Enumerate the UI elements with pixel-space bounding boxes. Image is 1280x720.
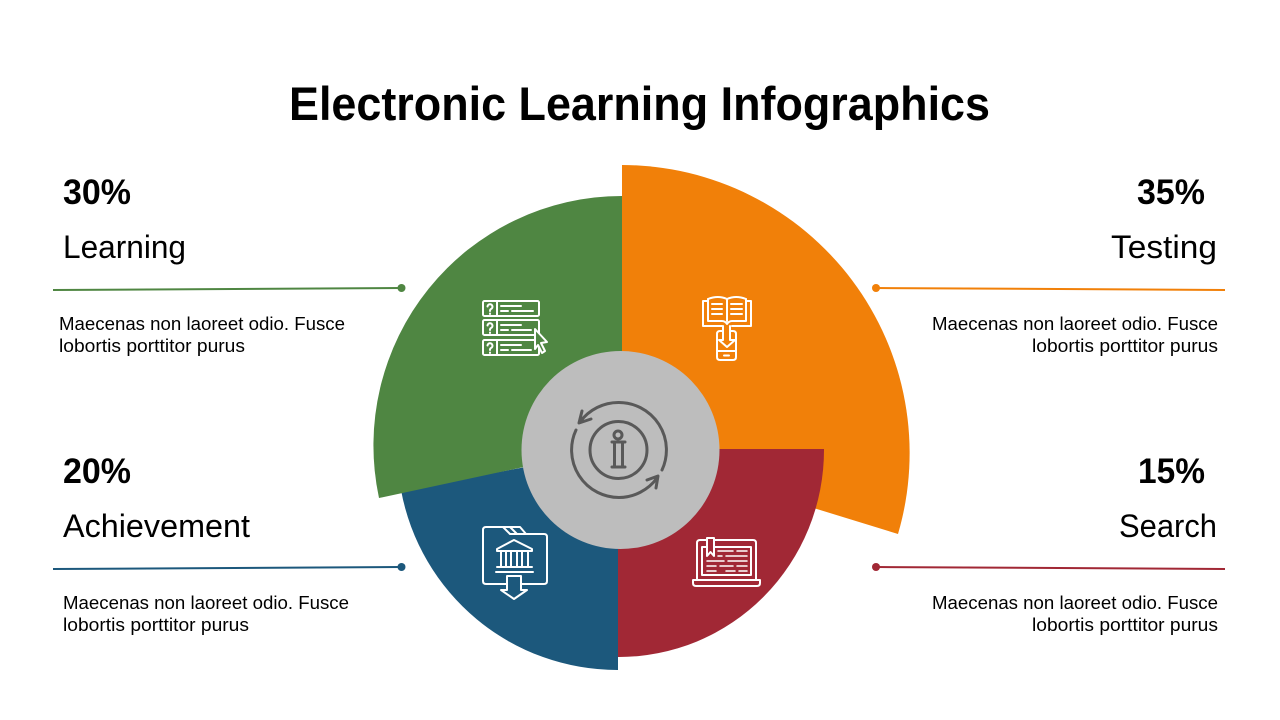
callout: Testing 35%: lobortis porttitor purus	[1032, 336, 1218, 356]
leader line: blue	[53, 563, 406, 571]
segment: blue achievement 20%	[401, 450, 618, 670]
title: Electronic Learning Infographics	[289, 77, 990, 130]
center circle	[522, 351, 720, 549]
segment: orange testing 35%	[622, 165, 910, 534]
icon: book and phone	[703, 297, 751, 360]
callout: Achievement 20%: Achievement	[63, 508, 250, 544]
callout: Learning 30%: Learning	[63, 229, 186, 265]
callout: Search 15%: Maecenas non laoreet odio. Fusce	[932, 593, 1218, 613]
callout: Achievement 20%	[53, 452, 406, 635]
callout: Learning 30%	[53, 173, 406, 356]
callout: Learning 30%: Maecenas non laoreet odio. Fusce	[59, 314, 345, 334]
callout: Testing 35%: Testing	[1111, 229, 1217, 265]
callout: Learning 30%: 30%	[63, 173, 131, 212]
callout: Search 15%: lobortis porttitor purus	[1032, 615, 1218, 635]
callout: Learning 30%: lobortis porttitor purus	[59, 336, 245, 356]
icon: quiz list with cursor	[483, 301, 547, 355]
callout: Achievement 20%: Maecenas non laoreet odio. Fusce	[63, 593, 349, 613]
callout: Testing 35%: 35%	[1137, 173, 1205, 212]
callout: Testing 35%: Maecenas non laoreet odio. Fusce	[932, 314, 1218, 334]
callout: Achievement 20%: lobortis porttitor purus	[63, 615, 249, 635]
icon: folder with building and download arrow	[483, 527, 547, 599]
leader line: orange	[872, 284, 1225, 292]
leader line: green	[53, 284, 406, 292]
segment: green learning 30%	[373, 196, 622, 498]
callout: Testing 35%	[872, 173, 1225, 356]
icon: info cycle	[572, 402, 666, 498]
callout: Achievement 20%: 20%	[63, 452, 131, 491]
callout: Search 15%: 15%	[1138, 452, 1205, 491]
leader line: red	[872, 563, 1225, 571]
callout: Search 15%: Search	[1119, 508, 1217, 544]
callout: Search 15%	[872, 452, 1225, 635]
segment: red search 15%	[618, 449, 824, 657]
donut chart	[373, 165, 910, 670]
icon: laptop with e-book	[693, 538, 760, 586]
